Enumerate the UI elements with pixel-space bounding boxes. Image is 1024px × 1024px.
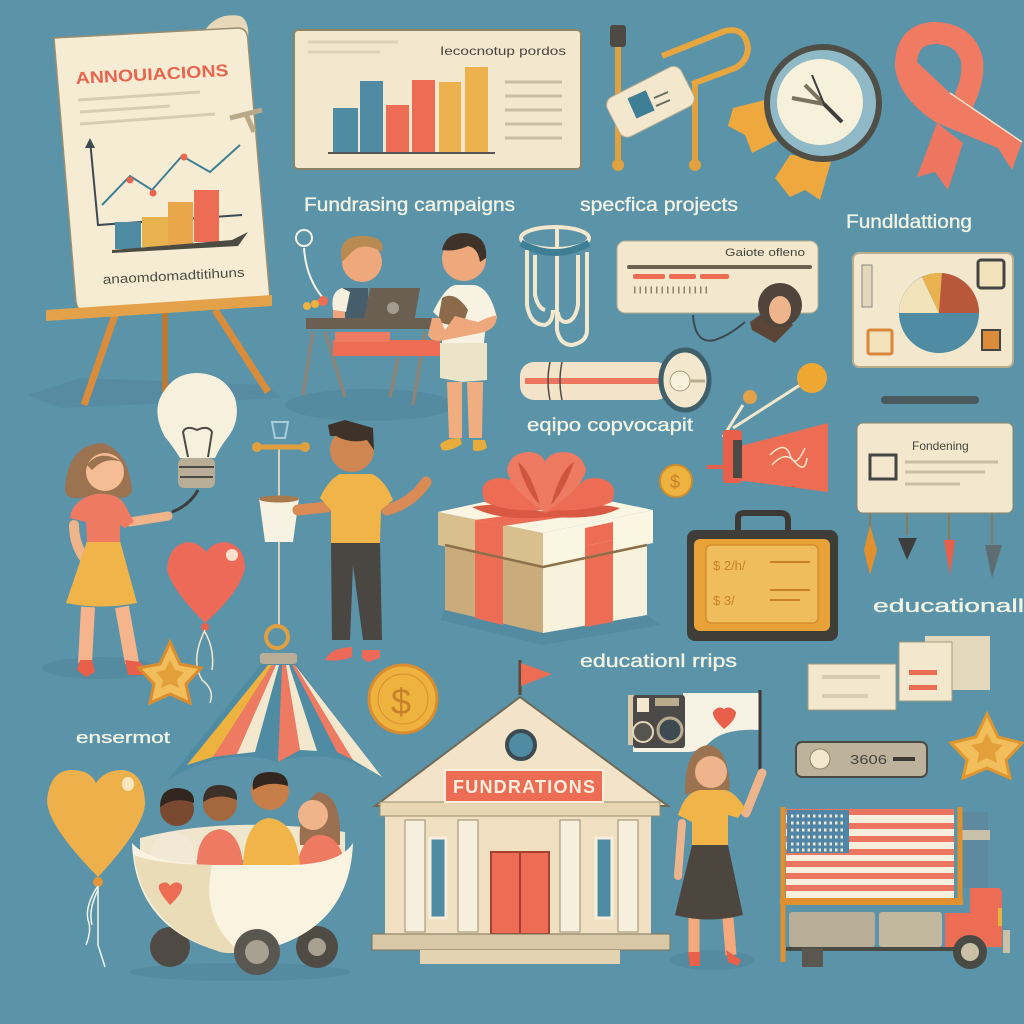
panel: device card: Gaiote ofleno (725, 247, 805, 259)
icon: gold star small (139, 642, 201, 703)
icon: heart balloon red (167, 542, 245, 703)
bowl cart (132, 843, 353, 975)
icon: rolled tube and megaphone (520, 350, 709, 410)
boy with book (428, 233, 497, 451)
icon: truck with flag (780, 807, 1010, 969)
icon: dollar coin small: $ (670, 472, 680, 492)
panel: fundraising card with pins: Fondening (912, 439, 969, 453)
panel: device card (617, 241, 818, 343)
icon: lock and tag (603, 25, 748, 171)
icon: red megaphone (707, 363, 828, 492)
label: educational trips: educationl rrips (580, 651, 737, 671)
badge: amount plate: 3606 (850, 752, 887, 767)
icon: paper clip frame (521, 225, 589, 345)
icon: dollar coin large: $ (391, 681, 411, 722)
panel: bar chart card: Iecocnotup pordos (440, 44, 566, 58)
figure: girl with lightbulb (42, 443, 168, 679)
icon: clock with medal ribbon (728, 44, 882, 200)
icon: briefcase tablet: $ 2/h/ (713, 558, 746, 573)
icon: dollar coin small (660, 465, 692, 497)
panel: pie chart card (853, 253, 1013, 367)
badge: amount plate (796, 742, 927, 777)
laptop (362, 288, 420, 329)
line chart (85, 138, 242, 225)
boy at laptop (332, 236, 383, 328)
icon: briefcase tablet (687, 513, 838, 641)
label: specific projects: specfica projects (580, 195, 738, 216)
figures: children in bowl cart (130, 772, 353, 981)
icon: heart balloon yellow (47, 770, 145, 967)
bow (472, 452, 620, 518)
icon: gold star large (951, 714, 1022, 778)
label: educational: educationall (873, 596, 1024, 616)
panel: announcements easel chart: anaomdomadtitihuns (102, 265, 246, 287)
icon: plant scale with cup (252, 422, 310, 648)
panel: announcements easel chart (28, 15, 282, 408)
building: foundations school (372, 660, 670, 964)
label: fundraising campaigns: Fundrasing campaigns (304, 195, 515, 216)
label: equipo: eqipo copvocapit (527, 415, 693, 435)
bar chart (112, 190, 248, 253)
label: fundraising: Fundldattiong (846, 212, 972, 233)
heading: announcements: ANNOUIACIONS (75, 61, 229, 88)
icon: awareness ribbon (895, 33, 1022, 190)
icon: lightbulb (157, 373, 237, 512)
figure: girl with flag (670, 745, 762, 970)
icon: briefcase tablet: $ 3/ (713, 593, 735, 608)
building: foundations school: FUNDRATIONS (453, 777, 595, 797)
figure: man in yellow shirt (298, 420, 426, 662)
panel: fundraising card with pins (857, 400, 1013, 578)
label: ensemble: ensermot (76, 728, 170, 747)
icon: gift box (438, 452, 660, 645)
icon: camera and flag (628, 690, 760, 770)
icon: dollar coin large (369, 665, 437, 733)
cards: small notes (808, 636, 990, 710)
panel: bar chart card (294, 30, 581, 169)
sign (445, 770, 603, 802)
icon: striped umbrella tent (168, 653, 382, 780)
figures: two children with laptop (285, 230, 497, 451)
